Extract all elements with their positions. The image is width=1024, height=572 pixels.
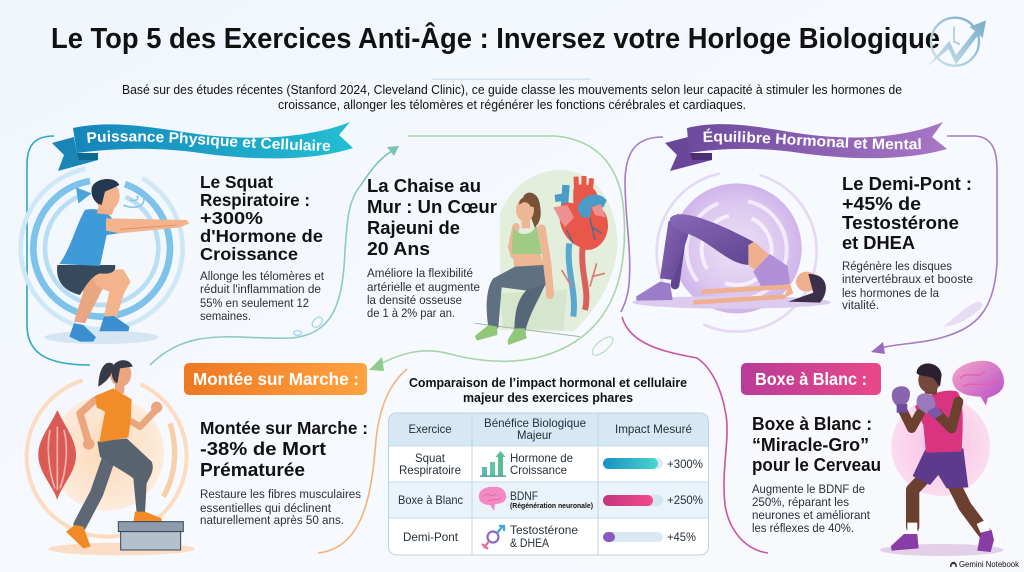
- label: Boxe à Blanc: [741, 363, 881, 395]
- description: la densité osseuse: [367, 293, 462, 307]
- row: boxing: (Régénération neuronale): [510, 503, 593, 510]
- description: naturellement après 50 ans.: [200, 513, 344, 527]
- description: Augmente le BDNF de: [752, 482, 865, 496]
- row: squat: Croissance: [510, 463, 567, 477]
- row: boxing: +250%: [667, 493, 703, 507]
- label: Montée sur Marche: [184, 363, 367, 395]
- description: de 1 à 2% par an.: [367, 306, 455, 320]
- row: squat: Hormone de: [510, 451, 573, 465]
- intro text: croissance, allonger les télomères et régénérer les fonctions cérébrales et cardiaques.: [278, 98, 746, 112]
- connector: purple frame: [621, 136, 997, 354]
- banner: Puissance Physique et Cellulaire: Puissance Physique et Cellulaire: [87, 130, 330, 151]
- row: bridge: Demi-Pont: [403, 530, 459, 544]
- heading: -38% de Mort: [200, 438, 326, 459]
- illustration: wall sit with heart: [475, 170, 617, 358]
- heading: [752, 413, 881, 475]
- table title: majeur des exercices phares: [463, 390, 633, 405]
- table header: Impact Mesuré: [615, 422, 692, 436]
- connector: teal to green arrow: [150, 146, 399, 365]
- description: [200, 269, 325, 323]
- description: les réflexes de 40%.: [752, 521, 854, 535]
- banner: Équilibre Hormonal et Mental: Équilibre Hormonal et Mental: [704, 128, 921, 150]
- heading: Rajeuni de: [367, 217, 460, 238]
- connector: orange: [318, 369, 407, 553]
- icon: rising bars: [480, 451, 506, 477]
- row: squat: [399, 451, 703, 477]
- panel: comparison table: [388, 375, 708, 555]
- heading: Boxe à Blanc :: [752, 413, 872, 434]
- table header: Majeur: [517, 428, 552, 442]
- row: squat: Respiratoire: [399, 463, 461, 477]
- label: Montée sur Marche: Montée sur Marche :: [193, 369, 359, 389]
- title underline: [432, 78, 591, 80]
- banner: Puissance Physique et Cellulaire: [52, 122, 353, 171]
- heading: Prématurée: [200, 459, 305, 480]
- description: artérielle et augmente: [367, 280, 480, 294]
- description: les hormones de la: [842, 286, 939, 300]
- heading: Mur : Un Cœur: [367, 196, 497, 217]
- heading: Respiratoire :: [200, 190, 310, 210]
- description: 55% en seulement 12: [200, 296, 309, 310]
- description: essentielles qui déclinent: [200, 501, 332, 515]
- connector: pink: [622, 317, 768, 553]
- description: intervertébraux et booste: [842, 272, 973, 286]
- heading: Croissance: [200, 244, 298, 264]
- table grid: [388, 413, 708, 555]
- connector: teal frame: [27, 136, 90, 365]
- heading: “Miracle-Gro”: [752, 434, 869, 455]
- description: vitalité.: [842, 298, 879, 312]
- heading: [842, 173, 972, 253]
- description: neurones et améliorant: [752, 508, 871, 522]
- panel: squat: [0, 138, 325, 359]
- table header: Exercice: [408, 422, 452, 436]
- description: [367, 266, 480, 320]
- heading: Testostérone: [842, 212, 959, 233]
- heading: Le Squat: [200, 172, 273, 192]
- table header: [408, 416, 692, 442]
- heading: Le Demi-Pont :: [842, 173, 972, 194]
- row: boxing: BDNF: [510, 489, 538, 503]
- row: boxing: [398, 487, 703, 511]
- heading: [200, 172, 323, 264]
- description: Restaure les fibres musculaires: [200, 487, 361, 501]
- row: squat: +300%: [667, 457, 703, 471]
- description: 250%, réparant les: [752, 495, 849, 509]
- row: bridge: [403, 523, 696, 550]
- panel: step up: [0, 350, 368, 563]
- panel: shadow boxing: [741, 361, 1004, 556]
- row: bridge: +45%: [667, 530, 696, 544]
- intro text: Basé sur des études récentes (Stanford 2024, Cleveland Clinic), ce guide classe les mouvements selon leur capacité à stimuler les hormones de: [122, 83, 902, 97]
- icon: gender symbols: [482, 526, 504, 549]
- heading: 20 Ans: [367, 238, 430, 259]
- illustration: woman in bridge pose: [632, 172, 982, 332]
- row: bridge: Testostérone: [510, 523, 578, 537]
- table header: Bénéfice Biologique: [484, 416, 586, 430]
- row: boxing: Boxe à Blanc: [398, 493, 463, 507]
- illustration: woman stepping up with muscle: [0, 350, 213, 563]
- description: Allonge les télomères et: [200, 269, 325, 283]
- illustration: boxer with brain: [880, 361, 1004, 556]
- table title: [409, 375, 687, 405]
- watermark: Gemini Notebook: Gemini Notebook: [959, 560, 1020, 569]
- banner: Équilibre Hormonal et Mental: [665, 122, 947, 171]
- heading: pour le Cerveau: [752, 454, 881, 475]
- icon: brain: [479, 487, 506, 511]
- description: semaines.: [200, 309, 251, 323]
- heading: [367, 175, 497, 259]
- description: Améliore la flexibilité: [367, 266, 473, 280]
- heading: [200, 418, 368, 480]
- description: [842, 259, 973, 312]
- title: Le Top 5 des Exercices Anti-Âge : Inversez votre Horloge Biologique: [51, 23, 940, 55]
- description: réduit l'inflammation de: [200, 282, 321, 296]
- panel: wall sit: [367, 170, 617, 358]
- row: bridge: & DHEA: [510, 536, 549, 550]
- heading: Montée sur Marche :: [200, 418, 368, 438]
- heading: d'Hormone de: [200, 226, 323, 246]
- connector: green: [369, 136, 625, 371]
- intro text: [122, 83, 902, 112]
- row: squat: Squat: [415, 451, 446, 465]
- description: Régénère les disques: [842, 259, 952, 273]
- label: Boxe à Blanc: Boxe à Blanc :: [755, 369, 867, 389]
- illustration: squatting man with breath rings: [0, 138, 324, 359]
- panel: glute bridge: [632, 172, 982, 332]
- description: [200, 487, 361, 527]
- heading: La Chaise au: [367, 175, 481, 196]
- icon: clock with rising arrow: [927, 18, 986, 67]
- table title: Comparaison de l’impact hormonal et cellulaire: [409, 375, 687, 390]
- heading: +300%: [200, 208, 263, 228]
- heading: +45% de: [842, 193, 921, 214]
- heading: et DHEA: [842, 232, 915, 253]
- description: [752, 482, 871, 535]
